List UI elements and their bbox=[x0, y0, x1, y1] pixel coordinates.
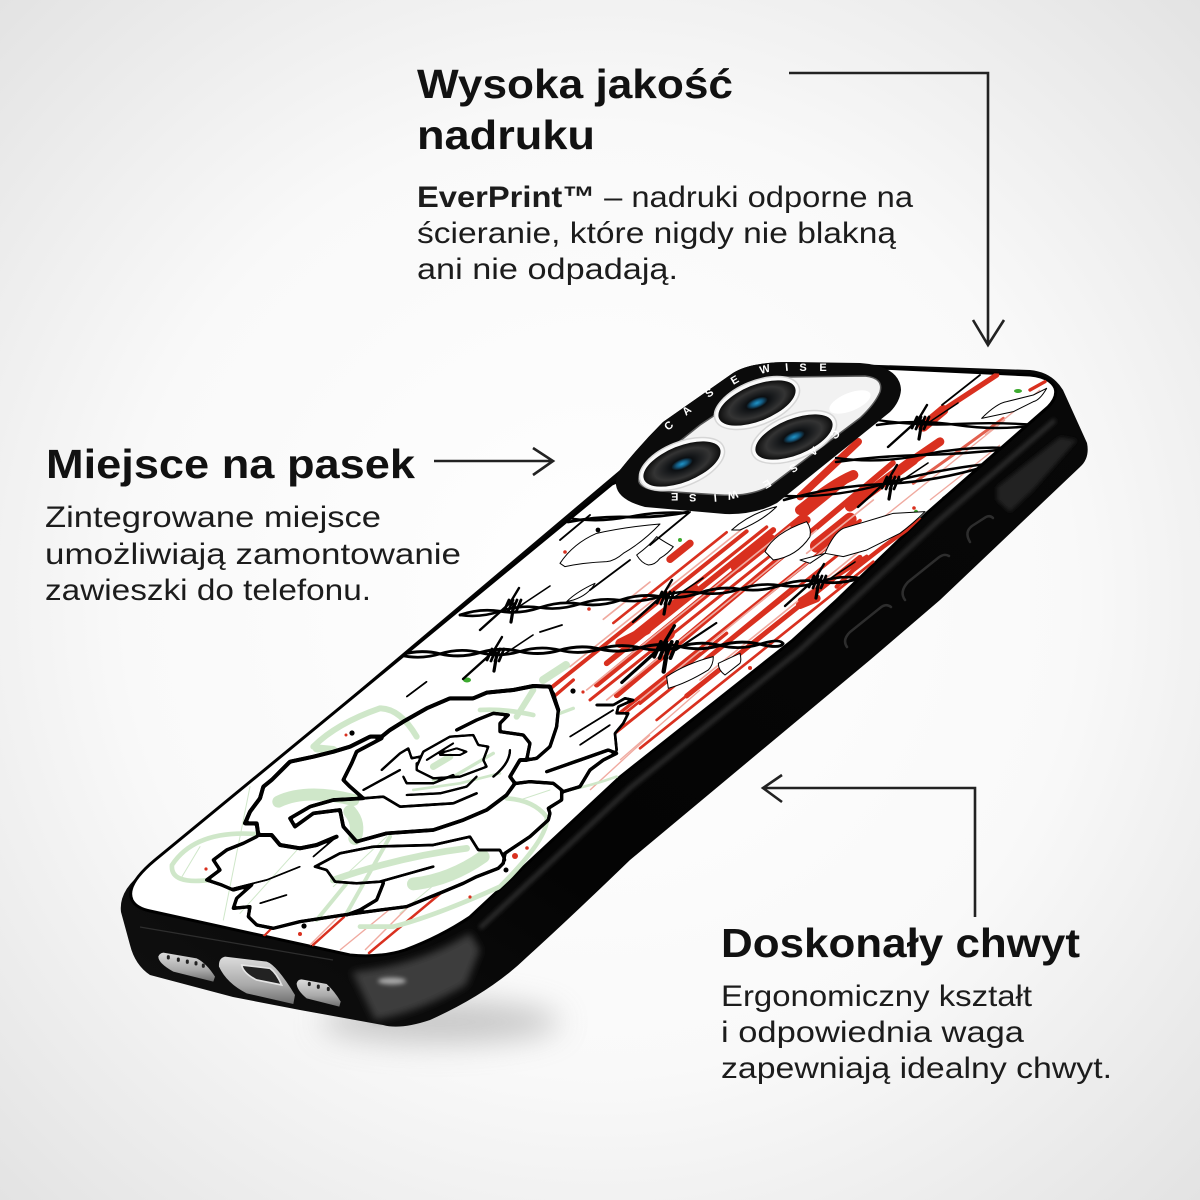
text: print quality description bbox=[417, 181, 913, 286]
lens top bbox=[707, 366, 807, 440]
text: strap mount description: umożliwiają zamontowanie bbox=[45, 538, 461, 571]
bottom corner highlight bbox=[352, 933, 480, 1020]
heading: print quality: Wysoka jakość bbox=[417, 61, 733, 107]
heading: print quality bbox=[417, 61, 733, 158]
inner rim line bbox=[140, 927, 333, 960]
speaker grille right bbox=[297, 979, 341, 1007]
lens left bbox=[632, 427, 732, 501]
pale pink upper streaks bbox=[310, 390, 1040, 950]
text: print quality description: ani nie odpadają. bbox=[417, 253, 678, 286]
heading: print quality: nadruku bbox=[417, 112, 595, 158]
barbed wire strands bbox=[400, 375, 1037, 682]
text: grip description: zapewniają idealny chwyt. bbox=[721, 1052, 1112, 1085]
phone case bbox=[121, 362, 1088, 1027]
case body bbox=[121, 362, 1088, 1027]
text: grip description: i odpowiednia waga bbox=[721, 1016, 1024, 1049]
printed back surface bbox=[131, 368, 1056, 956]
text: strap mount description: Zintegrowane miejsce bbox=[45, 501, 381, 534]
text: print quality description: EverPrint™ – nadruki odporne na bbox=[417, 181, 913, 214]
bottom ports bbox=[158, 953, 341, 1007]
heading: grip: Doskonały chwyt bbox=[721, 920, 1080, 966]
camera island bbox=[616, 362, 901, 514]
text: strap mount description: zawieszki do telefonu. bbox=[45, 574, 371, 607]
glare bbox=[826, 385, 874, 419]
arrow: to printed surface bbox=[789, 73, 1004, 345]
rim sheen line bbox=[480, 420, 1055, 928]
speaker grille left bbox=[158, 953, 215, 982]
upper red streaks bbox=[800, 375, 1045, 600]
brand text on bumper: CASEWISE bbox=[662, 362, 827, 433]
lower red streaks bbox=[263, 893, 441, 953]
island bumper bbox=[616, 362, 901, 514]
red paint streaks bbox=[550, 463, 893, 748]
lens right bbox=[744, 400, 844, 474]
side buttons bbox=[845, 516, 993, 647]
rose outline bbox=[207, 682, 633, 928]
arrow: to case side bbox=[763, 775, 975, 917]
side pad: right corner bbox=[997, 437, 1077, 512]
charging port bbox=[219, 957, 295, 1004]
text: grip description: Ergonomiczny kształt bbox=[721, 980, 1033, 1013]
splatter dots bbox=[204, 389, 1022, 936]
brand text on bumper bbox=[662, 362, 842, 503]
white rose fill bbox=[272, 688, 630, 926]
heading: strap mount: Miejsce na pasek bbox=[46, 441, 415, 487]
print artwork bbox=[172, 375, 1047, 953]
text: grip description bbox=[721, 980, 1112, 1085]
brand text on bumper: CASEWISE bbox=[671, 427, 842, 503]
clear window bbox=[639, 376, 881, 495]
pink paint streaks bbox=[570, 500, 890, 700]
pale green background lettering bbox=[172, 690, 617, 927]
right leaves bbox=[800, 388, 1047, 563]
text: strap mount description bbox=[45, 501, 461, 607]
arrow: to strap slot bbox=[434, 448, 553, 475]
text: print quality description: ścieranie, które nigdy nie blakną bbox=[417, 217, 896, 250]
bottom corner bright reflection bbox=[378, 978, 406, 984]
leaves bbox=[560, 507, 810, 688]
shadow under phone bbox=[320, 1000, 560, 1044]
green paint fragment bbox=[543, 665, 566, 680]
